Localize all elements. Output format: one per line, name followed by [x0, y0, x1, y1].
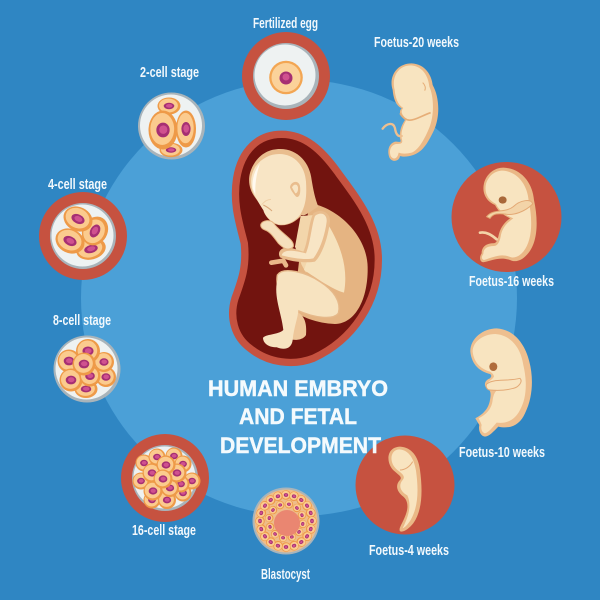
icon: foetus 4 weeks	[356, 436, 454, 534]
fetus head	[249, 149, 318, 225]
womb	[233, 134, 378, 362]
fetus body	[293, 203, 368, 324]
fetus belly	[304, 225, 345, 293]
label: 16-cell stage: 16-cell stage	[132, 523, 196, 539]
front leg and foot	[263, 280, 298, 349]
main fetus in womb	[233, 134, 378, 362]
title	[208, 376, 388, 458]
label: 4-cell stage: 4-cell stage	[48, 177, 107, 193]
icon: blastocyst	[252, 488, 320, 554]
umbilical cord	[271, 261, 286, 265]
back leg	[291, 310, 306, 340]
title: DEVELOPMENT	[220, 433, 382, 458]
label: foetus 10 weeks: Foetus-10 weeks	[459, 445, 545, 461]
hand at face	[261, 221, 293, 249]
central light circle	[81, 80, 517, 516]
icon: 8-cell stage	[54, 336, 120, 402]
icon: 16-cell stage	[121, 434, 209, 522]
title: HUMAN EMBRYO	[208, 376, 388, 401]
label: foetus 4 weeks: Foetus-4 weeks	[369, 543, 449, 559]
ear	[290, 182, 300, 197]
label: 2-cell stage: 2-cell stage	[140, 65, 199, 81]
icon: foetus 10 weeks	[470, 328, 532, 437]
label: foetus 16 weeks: Foetus-16 weeks	[469, 274, 554, 290]
icon: 4-cell stage	[39, 192, 127, 280]
icon: foetus 20 weeks	[383, 63, 438, 161]
icon: foetus 16 weeks	[452, 162, 562, 272]
thigh	[277, 271, 339, 317]
head highlight	[252, 163, 260, 195]
label: fertilized egg: Fertilized egg	[253, 16, 318, 32]
label: 8-cell stage: 8-cell stage	[53, 313, 111, 329]
label: foetus 20 weeks: Foetus-20 weeks	[374, 35, 459, 51]
closed eye	[263, 205, 272, 211]
upper arm	[279, 211, 330, 262]
icon: 2-cell stage	[138, 92, 205, 160]
title: AND FETAL	[239, 404, 357, 429]
fetus chest	[295, 215, 315, 273]
label: blastocyst: Blastocyst	[261, 567, 310, 583]
icon: fertilized egg	[242, 32, 330, 120]
